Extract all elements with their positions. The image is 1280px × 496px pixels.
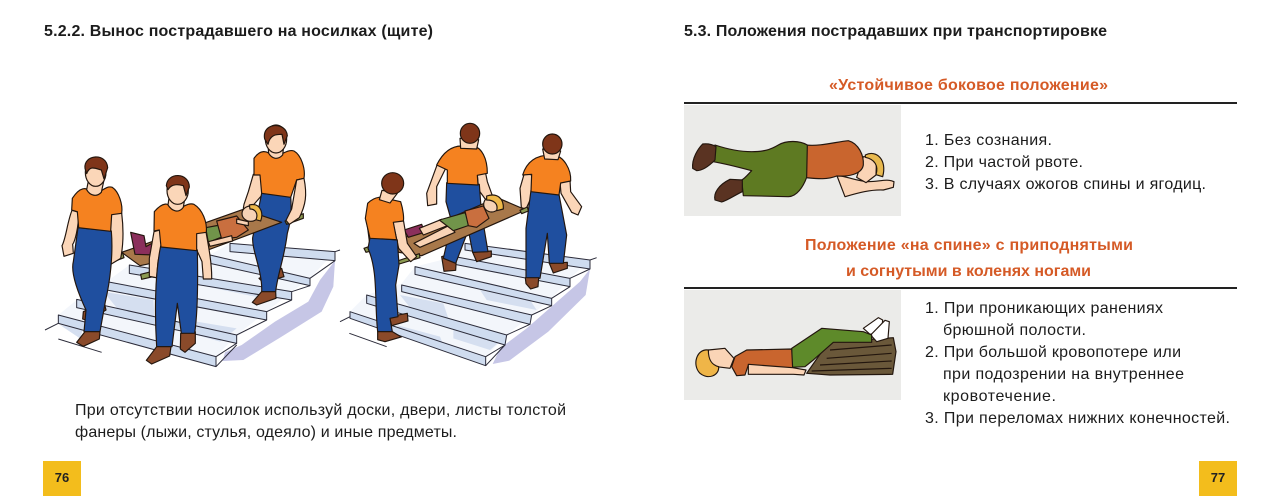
page number tab: 76 [43,461,81,496]
stretcher with casualty [364,195,528,264]
list: recovery position indications: 3. В случаях ожогов спины и ягодиц. [925,176,1206,193]
heading: supine position with raised bent legs: Положение «на спине» с приподнятыми [805,237,1133,254]
list: recovery position indications [925,132,1206,193]
heading: section 5.2.2: 5.2.2. Вынос пострадавшего на носилках (щите) [44,23,433,40]
bearer: centre [146,176,212,364]
page number tab: 77 [1199,461,1237,496]
panel: supine position illustration [684,290,901,400]
list: supine position indications: брюшной полости. [943,322,1086,339]
bearer: left [62,157,123,346]
stairs [340,243,597,366]
page number tab: 76: 76 [55,470,69,485]
panel: recovery position illustration [684,105,901,216]
bearer: right [243,125,304,305]
heading: recovery position: «Устойчивое боковое положение» [829,77,1108,94]
bearer: right [520,134,582,289]
list: supine position indications: при подозрении на внутреннее [943,366,1184,383]
illustration: three bearers carrying stretcher up the stairs [340,123,597,366]
list: supine position indications [925,300,1230,427]
page number tab: 77: 77 [1211,470,1225,485]
heading: supine position with raised bent legs: и согнутыми в коленях ногами [846,263,1091,280]
casualty lying on back with legs on a roll [696,318,896,377]
heading: supine position with raised bent legs [805,237,1133,280]
stairs [45,243,340,367]
list: supine position indications: 3. При переломах нижних конечностей. [925,410,1230,427]
list: supine position indications: 1. При проникающих ранениях [925,300,1163,317]
text block: stretcher substitutes [75,402,566,441]
stretcher with casualty [103,178,306,279]
list: recovery position indications: 2. При частой рвоте. [925,154,1083,171]
text block: stretcher substitutes: фанеры (лыжи, стулья, одеяло) и иные предметы. [75,424,457,441]
list: supine position indications: 2. При большой кровопотере или [925,344,1181,361]
casualty lying on side [693,141,894,202]
bearer: left [365,173,417,342]
bearer: back centre [427,123,493,271]
list: supine position indications: кровотечение. [943,388,1056,405]
text block: stretcher substitutes: При отсутствии носилок используй доски, двери, листы толстой [75,402,566,419]
heading: section 5.3: 5.3. Положения пострадавших при транспортировке [684,23,1107,40]
illustration: three bearers carrying stretcher down the stairs [45,125,340,367]
list: recovery position indications: 1. Без сознания. [925,132,1052,149]
